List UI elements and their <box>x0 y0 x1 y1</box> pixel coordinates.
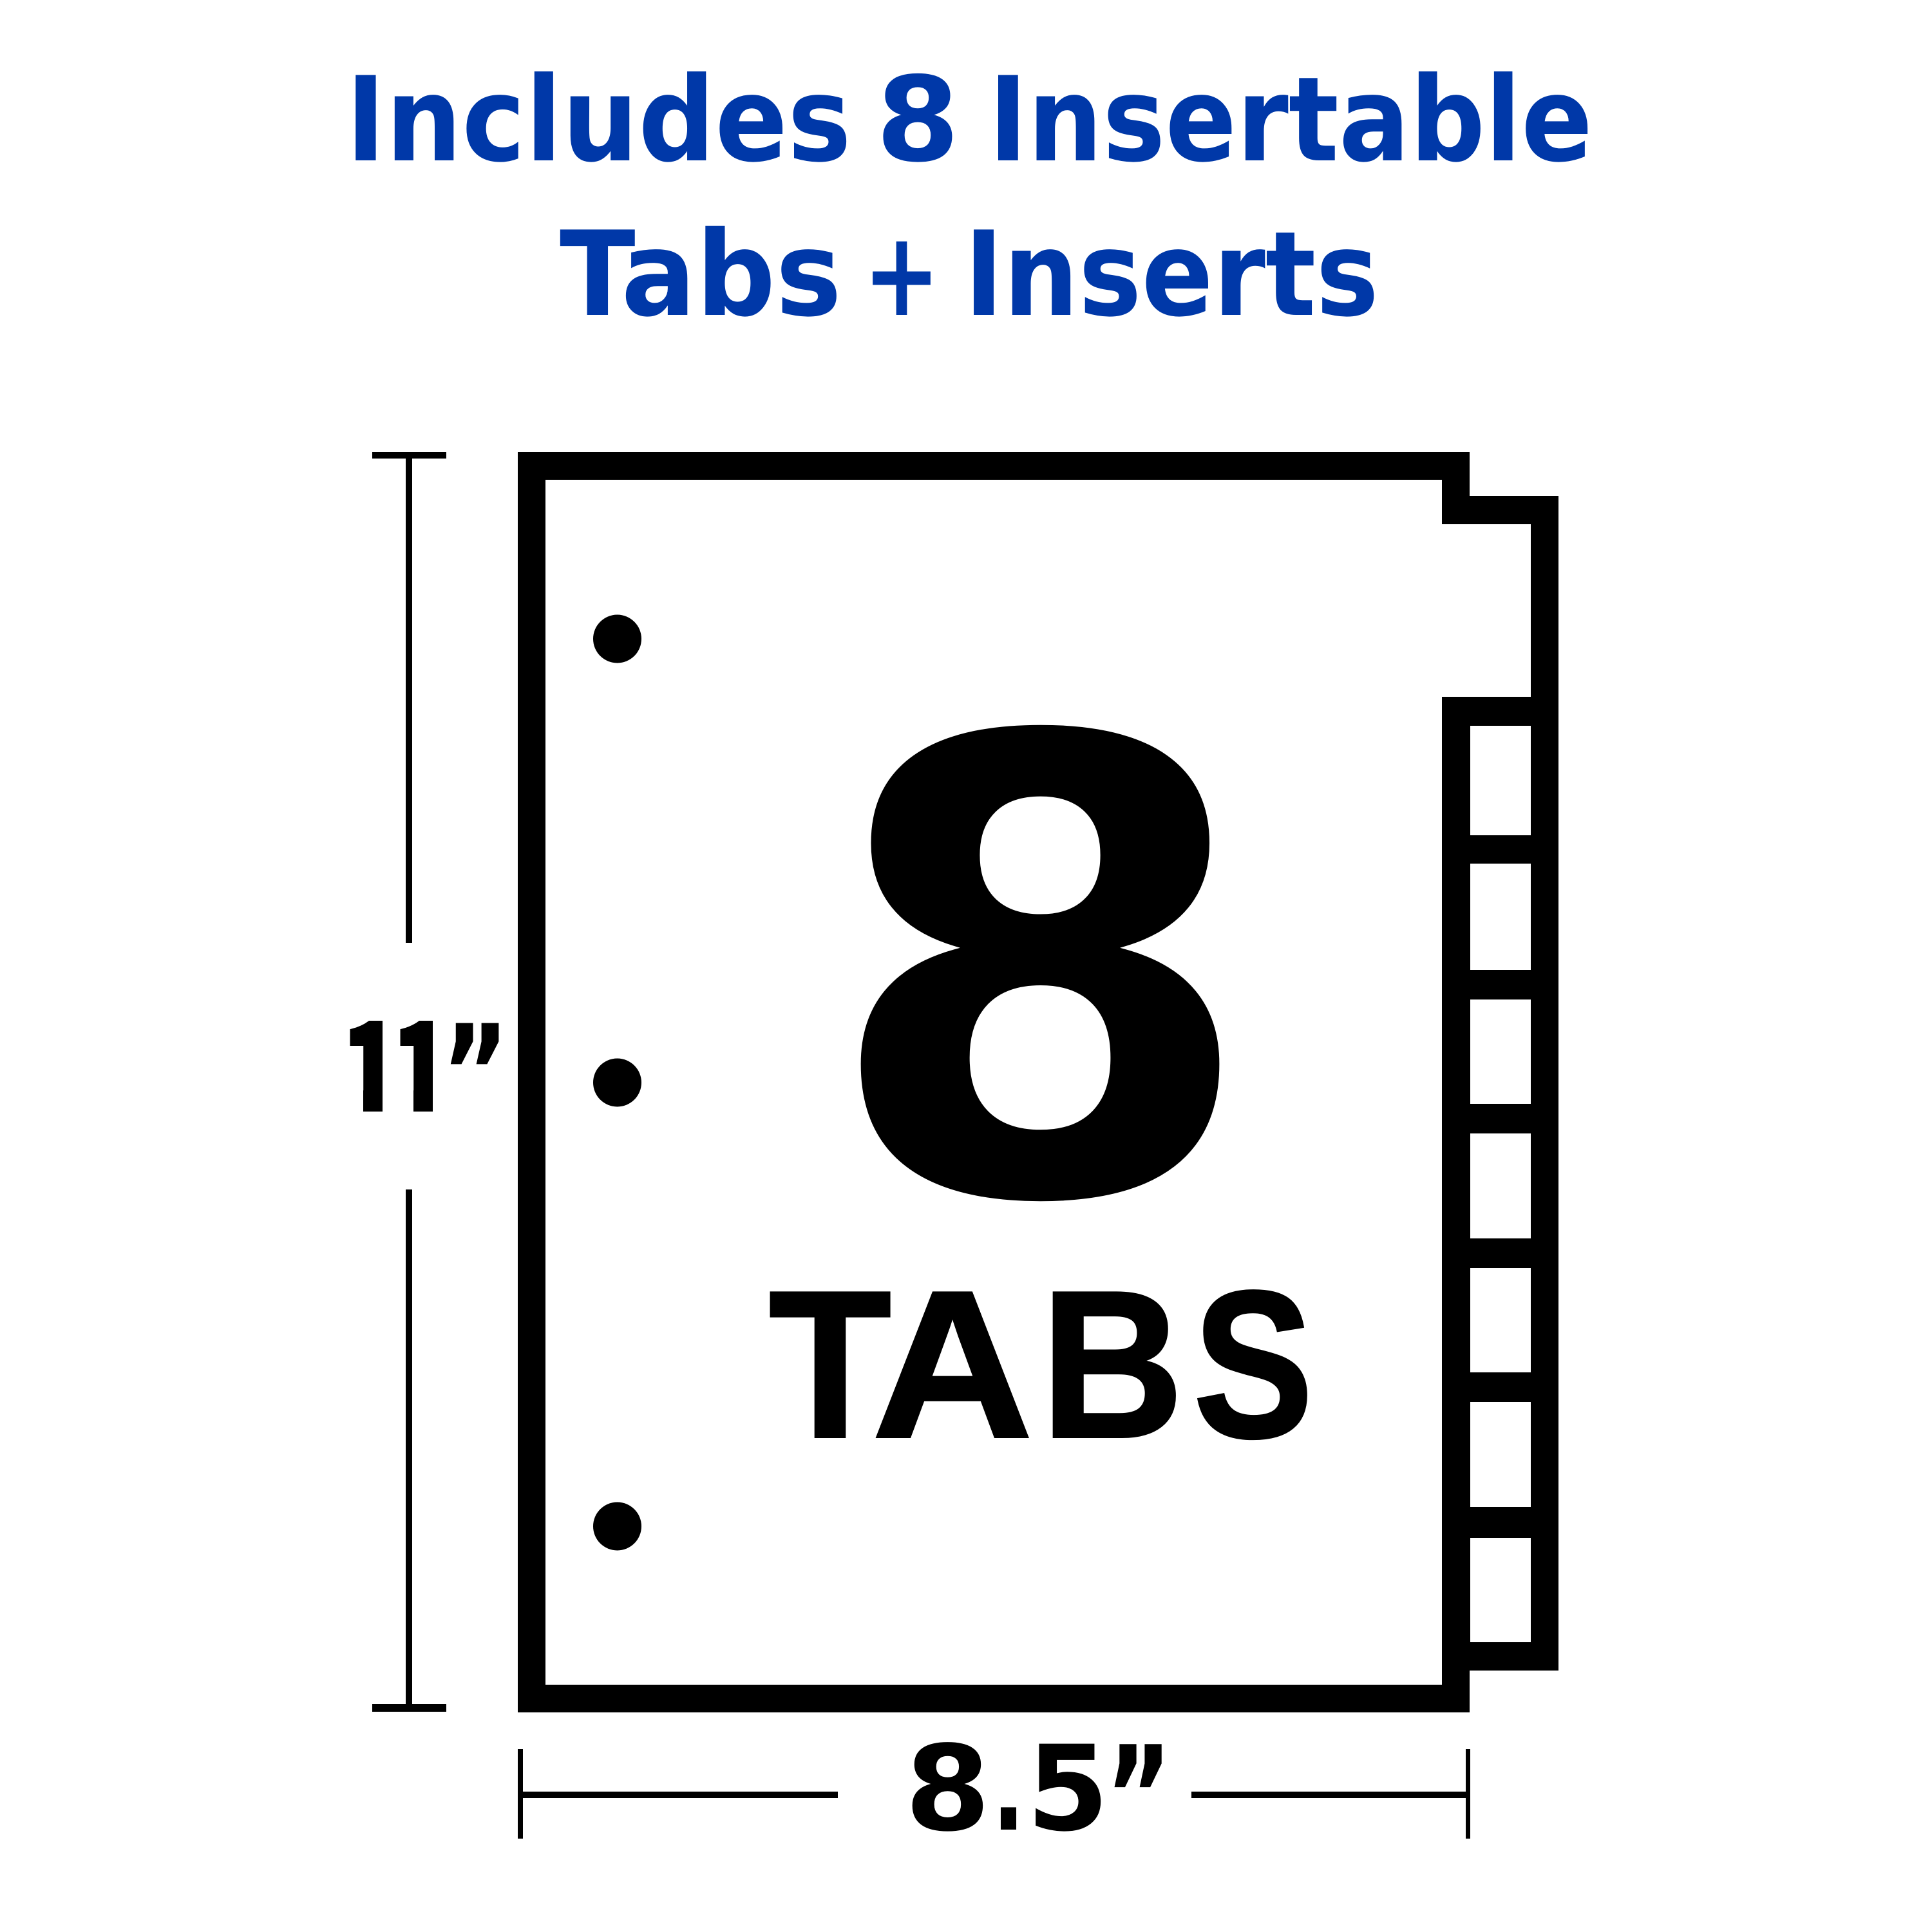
height label <box>350 1021 498 1112</box>
width dimension line <box>518 1749 1470 1839</box>
height label: 1 <box>392 971 451 1144</box>
title: Insertable <box>989 52 1593 188</box>
TABS label: S <box>1193 1247 1313 1481</box>
width label: 5 <box>1027 1721 1109 1858</box>
width label: ” <box>1105 1716 1172 1878</box>
TABS label: T <box>769 1247 891 1481</box>
title <box>346 52 1593 343</box>
height label: ” <box>441 998 509 1151</box>
width label <box>905 1716 1172 1878</box>
title: 8 <box>876 52 960 188</box>
width label: 8 <box>905 1721 990 1858</box>
height label: 1 <box>342 971 401 1144</box>
title: Inserts <box>964 206 1379 343</box>
title: Includes <box>346 52 851 188</box>
TABS label: A <box>872 1247 1033 1481</box>
title: + <box>863 206 940 343</box>
height dimension line <box>372 452 446 1712</box>
TABS label: B <box>1041 1247 1184 1481</box>
divider page outline with tabs <box>518 452 1558 1712</box>
tab cells <box>1470 726 1531 1642</box>
TABS label <box>769 1247 1313 1481</box>
binder holes <box>593 614 641 1551</box>
title: Tabs <box>560 206 842 343</box>
infographic canvas <box>350 71 1588 1839</box>
width label: . <box>992 1721 1025 1858</box>
